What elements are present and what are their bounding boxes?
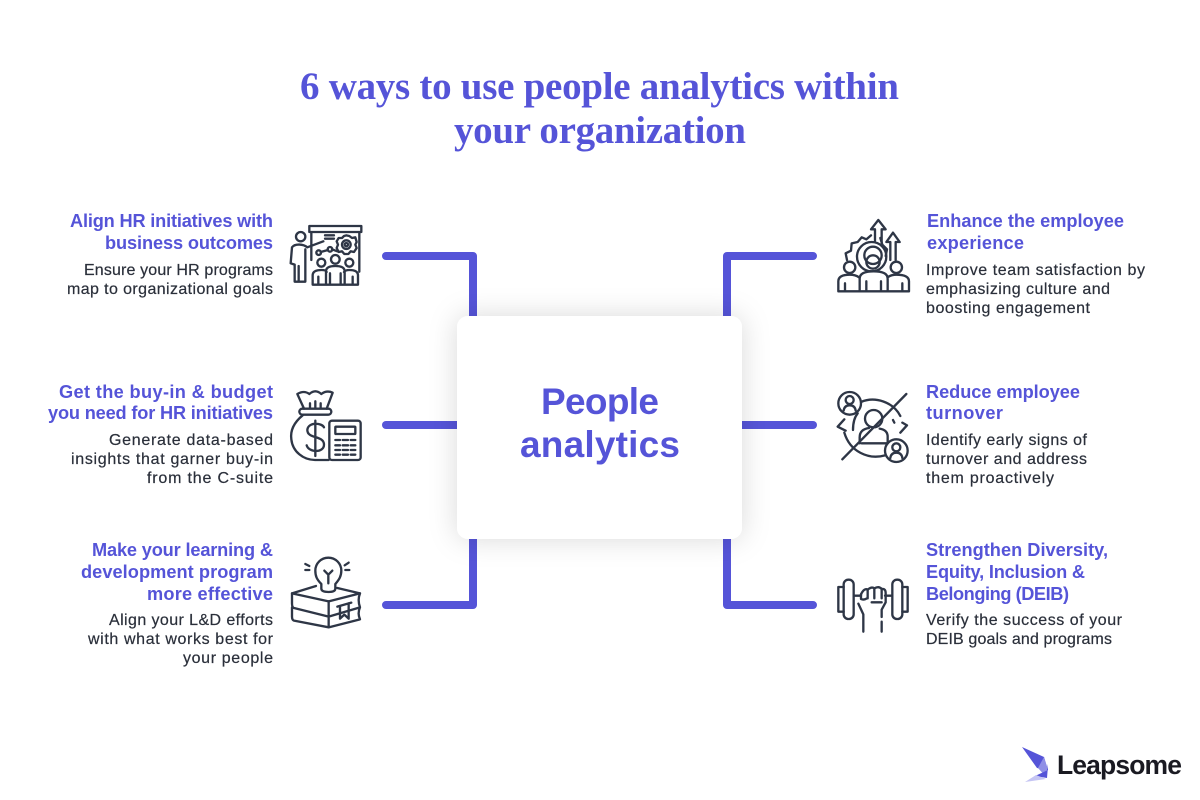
panel: employee experience: Improve team satisfaction by	[926, 262, 1145, 279]
center card: People analytics	[457, 316, 742, 539]
panel: employee experience	[926, 211, 1145, 317]
panel: strengthen DEIB: Verify the success of your	[926, 612, 1123, 629]
title: your organization	[454, 109, 746, 152]
panel: learning and development	[81, 540, 274, 667]
panel: employee experience: experience	[927, 233, 1024, 253]
panel: learning and development: development program	[81, 562, 273, 582]
panel: reduce employee turnover: turnover and address	[926, 451, 1087, 468]
panel: buy-in and budget: you need for HR initiatives	[48, 403, 273, 423]
panel: strengthen DEIB	[926, 540, 1123, 648]
panel: reduce employee turnover: turnover	[926, 403, 1003, 423]
logo mark: bird	[1022, 747, 1048, 782]
panel: buy-in and budget: insights that garner buy-in	[71, 451, 273, 468]
panel: reduce employee turnover: Reduce employee	[926, 382, 1080, 402]
panel: learning and development: with what works best for	[87, 631, 274, 648]
panel: reduce employee turnover: them proactively	[926, 470, 1054, 487]
panel: buy-in and budget: Get the buy-in & budget	[59, 382, 273, 402]
panel: buy-in and budget: Generate data-based	[109, 432, 273, 449]
panel: strengthen DEIB: Strengthen Diversity,	[926, 540, 1108, 560]
panel: employee experience: Enhance the employee	[927, 211, 1124, 231]
panel: align HR initiatives: Align HR initiatives with	[70, 211, 273, 231]
icon: team with gear and arrows	[838, 220, 909, 291]
panel: align HR initiatives: map to organizational goals	[67, 281, 273, 298]
panel: employee experience: boosting engagement	[926, 300, 1091, 317]
icon: crossed-out turnover	[838, 392, 908, 462]
panel: strengthen DEIB: Equity, Inclusion &	[926, 562, 1085, 582]
title	[300, 65, 899, 152]
panel: buy-in and budget: from the C-suite	[147, 470, 273, 487]
panel: strengthen DEIB: Belonging (DEIB)	[926, 584, 1069, 604]
logo: Leapsome	[1022, 747, 1182, 782]
panel: buy-in and budget	[48, 382, 273, 487]
icon: fist lifting dumbbell	[838, 580, 908, 632]
icon: presenter with gear	[291, 226, 361, 285]
panel: reduce employee turnover: Identify early signs of	[926, 432, 1088, 449]
connector: bottom right	[727, 530, 813, 605]
connector: middle right	[730, 421, 813, 429]
center card: People analytics: People	[541, 381, 659, 422]
panel: align HR initiatives: Ensure your HR programs	[84, 262, 273, 279]
connector: middle left	[386, 421, 470, 429]
center card: People analytics: analytics	[520, 424, 680, 465]
icon: light bulb on books	[292, 558, 360, 627]
panel: learning and development: your people	[183, 650, 273, 667]
connector: top left	[386, 256, 473, 330]
connector: top right	[727, 256, 813, 330]
panel: employee experience: emphasizing culture and	[926, 281, 1110, 298]
logo: Leapsome: Leapsome	[1057, 750, 1182, 780]
panel: reduce employee turnover	[926, 382, 1088, 487]
panel: align HR initiatives: business outcomes	[105, 233, 273, 253]
panel: learning and development: Make your learning &	[92, 540, 273, 560]
panel: learning and development: Align your L&D efforts	[109, 612, 273, 629]
icon: money bag and calculator	[291, 391, 361, 460]
panel: strengthen DEIB: DEIB goals and programs	[926, 631, 1112, 648]
title: 6 ways to use people analytics within	[300, 65, 899, 108]
connector: bottom left	[386, 530, 473, 605]
panel: learning and development: more effective	[147, 584, 273, 604]
panel: align HR initiatives	[67, 211, 273, 298]
